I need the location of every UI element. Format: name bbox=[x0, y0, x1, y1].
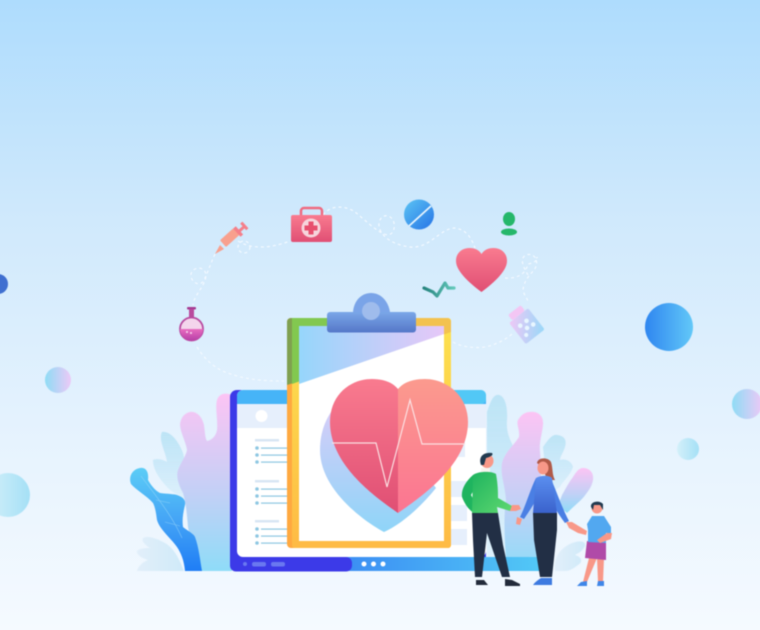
woman hand bbox=[516, 517, 522, 525]
man hand bbox=[510, 505, 521, 511]
man collar bbox=[481, 468, 490, 474]
person: boy bbox=[577, 502, 612, 586]
man legs bbox=[472, 513, 510, 577]
icon: user bbox=[501, 212, 517, 236]
illustration scene bbox=[0, 200, 760, 586]
woman arms bbox=[520, 478, 542, 519]
icon: first aid kit bbox=[291, 208, 332, 242]
big heart bbox=[330, 379, 468, 513]
icon: small heart bbox=[456, 248, 507, 292]
icon: flask bbox=[180, 307, 203, 340]
laptop right panels bbox=[451, 441, 467, 545]
icon: pill bbox=[404, 200, 434, 230]
clipboard clip bbox=[327, 293, 416, 332]
clipboard tinted corner bbox=[299, 326, 444, 384]
woman hair bbox=[537, 458, 555, 480]
man shoes bbox=[476, 580, 488, 585]
leaf: front blue bbox=[130, 468, 202, 571]
leaves: back right bbox=[487, 395, 593, 571]
man arm bbox=[462, 475, 477, 513]
laptop list rows bbox=[255, 439, 291, 545]
joined hands and boy arm bbox=[566, 522, 587, 535]
laptop bottom bar bbox=[236, 557, 540, 571]
boy shoes bbox=[577, 581, 604, 586]
woman top bbox=[533, 476, 557, 513]
boy head bbox=[592, 502, 602, 514]
boy arm bbox=[597, 533, 612, 543]
man sweater bbox=[472, 472, 512, 513]
heartbeat line bbox=[332, 400, 465, 487]
leaves: back left bbox=[137, 394, 232, 571]
clipboard bbox=[287, 293, 451, 548]
big heart shadow bbox=[320, 408, 436, 532]
icon: syringe bbox=[215, 222, 248, 254]
laptop top bar bbox=[237, 390, 486, 404]
laptop bbox=[230, 390, 540, 572]
person: man bbox=[462, 453, 521, 586]
man head bbox=[480, 454, 494, 468]
icon: pill bottle bbox=[505, 303, 545, 344]
dashed route bbox=[191, 207, 538, 381]
floating bubbles bbox=[0, 274, 760, 517]
woman shoes bbox=[533, 578, 552, 585]
boy shirt bbox=[587, 516, 611, 543]
person: woman bbox=[516, 458, 587, 585]
boy shorts bbox=[585, 541, 606, 560]
woman legs bbox=[533, 513, 557, 577]
boy legs bbox=[583, 558, 597, 582]
icon: pulse bbox=[424, 283, 454, 296]
